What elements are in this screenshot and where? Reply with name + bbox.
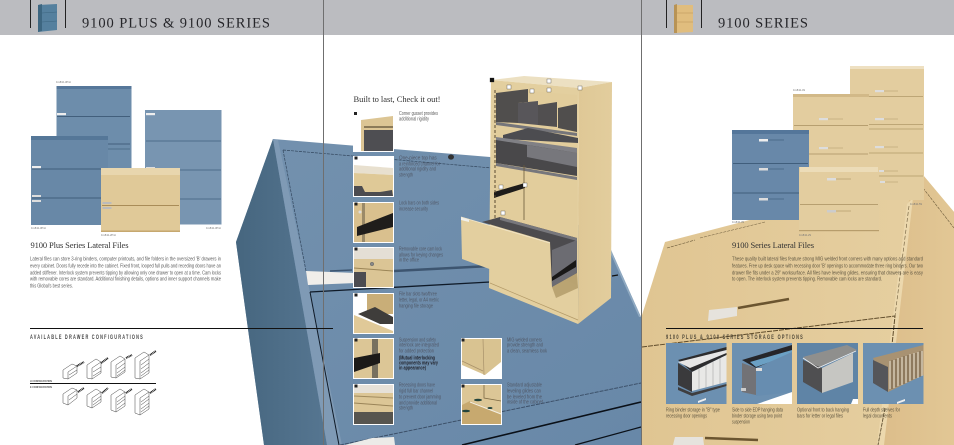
text block: 9100 description: to open. The interlock system prevents tipping. Removable cam locks are standard. [732,277,882,283]
product photo: 9100 lateral files [732,66,924,237]
product photo: 9100 Plus lateral files: 9-1810-3P/H [56,80,71,84]
feature 7: recessing doors: to prevent door jamming [399,395,441,401]
storage option 2 caption: binder storage using two point [732,414,782,420]
feature 8: MIG welded corners: a clean, seamless look [507,349,547,355]
feature 6: suspension and safety interlock [353,338,439,379]
feature 8: MIG welded corners: provide strength and [507,343,543,349]
storage option 4 caption [863,408,900,420]
feature 9: adjustable leveling glides [461,383,543,425]
storage option 1: ring binder [666,343,726,404]
feature 7: recessing doors [353,383,441,425]
feature 6: suspension and safety interlock: Suspension and safety [399,338,436,344]
feature 5: file bar slots: File bar slots two/three [399,292,437,298]
heading: available drawer configurations: AVAILABLE DRAWER CONFIGURATIONS [30,334,143,341]
storage option 4 caption: legal documents [863,414,892,420]
feature 4: removable core cam lock [353,247,443,288]
title: left: 9100 PLUS & 9100 SERIES [82,16,270,32]
feature 7: recessing doors: strength [399,406,413,412]
section rule [666,328,923,330]
heading: storage options: 9100 PLUS & 9100 SERIES STORAGE OPTIONS [666,334,803,341]
feature 2: one-piece top: additional rigidity and [399,167,436,173]
product photo: 9100 Plus lateral files: 9-1842-2P/H [101,233,116,237]
product photo: 9100 Plus lateral files [31,80,222,237]
storage option 3: front to back hanging [797,343,858,404]
feature 1: corner gusset: additional rigidity [399,116,429,122]
storage option 1 caption: Ring binder storage in "B" type [666,408,720,414]
storage option 3 caption: bars for letter or legal files [797,414,843,420]
feature 4: removable core cam lock: Removable core cam lock [399,247,442,253]
callout markers [490,78,582,215]
feature 8: MIG welded corners: MIG welded corners [507,338,542,344]
feature 1: corner gusset: Corner gusset provides [399,111,438,117]
feature 5: file bar slots: hanging file storage [399,304,433,310]
drawer configuration diagrams: E CONFIGURATION [30,385,52,389]
header band [0,0,954,35]
feature 5: file bar slots [353,292,439,334]
feature 8: MIG welded corners [461,338,547,379]
drawer configuration diagrams: H CONFIGURATION [30,379,52,383]
feature 6: suspension and safety interlock: interlock are integrated [399,343,439,349]
feature 9: adjustable leveling glides: Standard adjustable [507,383,542,389]
product photo: 9100 Plus lateral files: 9-1842-3P/H [31,226,46,230]
storage option 2 caption [732,408,783,426]
storage option 4 caption: Full depth shelves for [863,408,900,414]
feature 9: adjustable leveling glides: be leveled from the [507,395,542,401]
open beige cabinet with callouts [461,76,612,324]
feature 6: suspension and safety interlock: (Mutual interlocking [399,356,435,362]
feature 6: suspension and safety interlock: components may vary [399,361,438,367]
drawer configuration diagrams [30,351,156,415]
feature 7: recessing doors: rigid full bar channel [399,389,433,395]
feature 9: adjustable leveling glides: inside of the cabinet [507,400,543,406]
title: right: 9100 SERIES [718,16,808,32]
storage option 1 caption: recessing door openings [666,414,707,420]
large blue cabinet background [236,139,641,445]
feature 3: lock bars: Lock bars on both sides [399,201,439,207]
storage option 3 caption [797,408,849,420]
feature 2: one-piece top: strength [399,173,413,179]
feature 4: removable core cam lock: in the office [399,258,419,264]
feature 3: lock bars [353,201,439,243]
feature 1: corner gusset [353,110,438,152]
feature 4: removable core cam lock: allows for keying changes [399,253,443,259]
heading: 9100 Plus Series Lateral Files: 9100 Plus Series Lateral Files [30,240,128,250]
product photo: 9100 Plus lateral files: 9-1842-3P/H [206,226,221,230]
text block: 9100 description: These quality built lateral files feature strong MIG welded front corners with many options and standard [732,257,923,263]
feature 5: file bar slots: letter, legal, or A4 metric [399,298,439,304]
product photo: 9100 lateral files: 9-1842-4S [793,88,805,92]
feature 7: recessing doors: Recessing doors have [399,383,435,389]
storage option 2: side to side hanging [732,343,792,404]
page fold lines [324,0,642,445]
heading: built to last: Built to last, Check it out! [354,94,440,104]
text block: 9100 Plus description: added stiffener. Interlock system prevents tipping by allowing only one drawer to open at a time. Cam locks [30,271,221,277]
storage option 2 caption: suspension [732,420,750,426]
text block: 9100 Plus description: with removable cores are standard. Additional finishing details, options and inner support channels make [30,277,221,283]
storage option 4: full depth shelves [863,343,924,404]
feature 2: one-piece top: One-piece top has [399,156,437,162]
large beige cabinet background [642,175,954,445]
storage option 2 caption: Side to side EDP hanging data [732,408,783,414]
feature 3: lock bars: increase security [399,207,428,213]
product photo: 9100 lateral files: 9-1842-2S [799,233,811,237]
text block: 9100 Plus description: Lateral files can store 3-ring binders, computer printouts, and file folders in the oversized 'B' drawers in [30,257,221,263]
storage option 3 caption: Optional front to back hanging [797,408,849,414]
feature 6: suspension and safety interlock: in appearance) [399,366,426,372]
text block: 9100 Plus description: every cabinet. Doors fully recede into the cabinet. Fixed front, looped full pulls and receding doors have an [30,264,221,270]
text block: 9100 description: drawer file fits under a 29" worksurface. All files have leveling glides, ensuring that drawers are is easy [732,271,923,277]
product photo: 9100 lateral files: 9-1842-5S [910,202,922,206]
product photo: 9100 lateral files: 9-1842-3S [732,220,744,224]
feature 2: one-piece top: a reinforced channel for [399,162,440,168]
text block: 9100 Plus description [30,257,221,290]
text block: 9100 Plus description: this Global's best series. [30,284,73,290]
feature 2: one-piece top [353,156,440,197]
icon: blue cabinet in header [30,0,66,32]
feature 6: suspension and safety interlock: for added protection [399,349,434,355]
feature 7: recessing doors: and provide additional [399,401,437,407]
feature 9: adjustable leveling glides: leveling glides can [507,389,541,395]
icon: beige cabinet in header [666,0,702,33]
section rule [30,328,333,330]
storage option 1 caption [666,408,720,420]
heading: 9100 Series Lateral Files: 9100 Series Lateral Files [732,240,814,250]
text block: 9100 description [732,257,923,283]
